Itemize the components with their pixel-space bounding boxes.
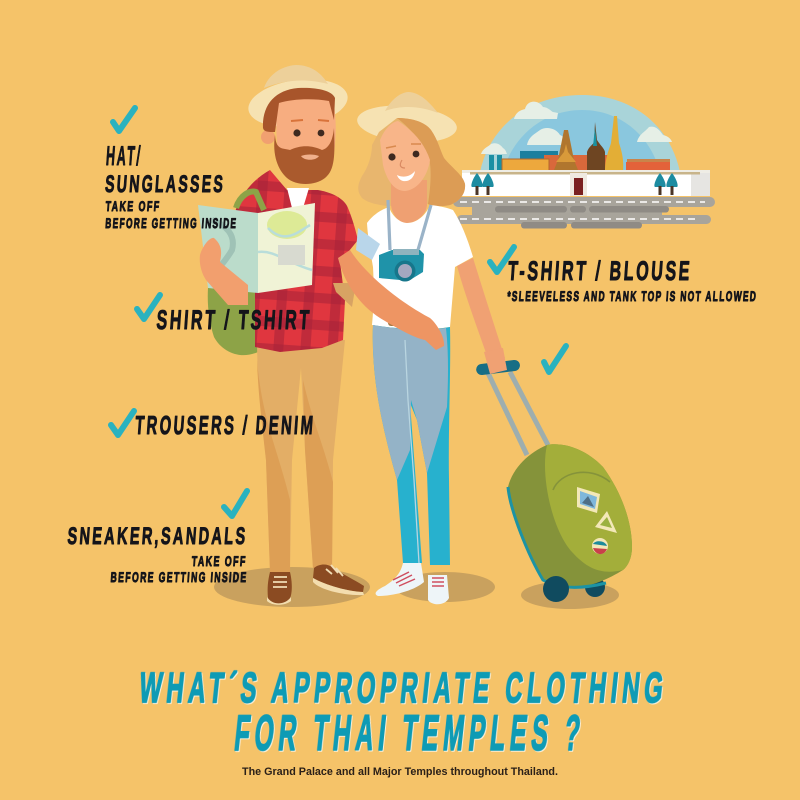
suitcase body	[508, 444, 632, 588]
woman's face	[380, 121, 430, 191]
illustration: Grand Palace temple scene	[453, 95, 715, 228]
label: hat and sunglasses: SUNGLASSES	[104, 171, 226, 198]
man's beard	[274, 128, 334, 184]
sky dome	[480, 95, 680, 172]
man's pointing arm	[338, 250, 444, 350]
man's trousers	[257, 340, 345, 572]
woman's white sneakers	[376, 563, 449, 604]
ground shadow: man	[214, 567, 370, 607]
man's neck and face	[261, 88, 336, 184]
label: hat and sunglasses: BEFORE GETTING INSIDE	[105, 215, 238, 231]
check: shoes	[224, 491, 247, 516]
label: T-shirt and blouse	[507, 256, 758, 304]
label: hat and sunglasses	[104, 141, 238, 231]
brown folded paper	[333, 283, 356, 307]
woman's hat	[356, 92, 458, 146]
label: trousers: TROUSERS / DENIM	[134, 410, 316, 440]
ground shadow: woman	[395, 572, 495, 602]
camera	[379, 249, 424, 282]
blue paper	[356, 228, 380, 260]
label: hat and sunglasses: TAKE OFF	[105, 198, 161, 214]
suitcase front panel	[545, 444, 632, 572]
ground shadow: suitcase	[521, 581, 619, 609]
label: sneakers and sandals: BEFORE GETTING INSIDE	[110, 569, 248, 585]
suitcase zip arc	[553, 472, 610, 490]
man's hair	[263, 88, 335, 132]
check: trousers	[111, 411, 134, 435]
label: hat and sunglasses: HAT/	[105, 141, 143, 171]
suitcase back wheel	[585, 577, 605, 597]
illustration: woman tourist	[356, 92, 505, 604]
man's white undershirt	[287, 188, 309, 208]
hand on handle	[484, 348, 507, 374]
woman's belt	[388, 317, 410, 326]
woman's jeans	[373, 325, 450, 565]
woman's white T-shirt	[367, 205, 473, 329]
label: shirt: SHIRT / TSHIRT	[156, 305, 313, 335]
woman's hair right side	[397, 118, 465, 206]
stickers	[577, 487, 617, 554]
man's eyes	[291, 120, 329, 137]
woman's arm	[457, 258, 505, 364]
label: sneakers and sandals: SNEAKER,SANDALS	[67, 523, 248, 550]
illustration: man tourist	[198, 65, 444, 605]
woman's eyes and smile	[386, 144, 421, 181]
woman's neck	[391, 180, 427, 223]
label: sneakers and sandals	[67, 523, 248, 585]
man's mouth	[301, 154, 319, 160]
trees	[471, 173, 678, 195]
folded map	[198, 203, 315, 293]
temple buildings	[489, 116, 670, 172]
illustration: green suitcase	[476, 348, 632, 602]
title	[137, 664, 670, 761]
man's red plaid shirt	[233, 170, 358, 352]
suitcase rim	[508, 487, 606, 587]
woman's hair	[358, 118, 465, 206]
check: suitcase	[544, 346, 566, 372]
subtitle: The Grand Palace and all Major Temples throughout Thailand.	[242, 766, 558, 778]
man's hat	[245, 65, 351, 133]
camera strap	[388, 200, 431, 250]
suitcase front wheel	[543, 576, 569, 602]
suitcase handle rods	[488, 372, 548, 455]
man's backpack	[208, 240, 258, 355]
check: shirt	[137, 295, 160, 319]
label: sneakers and sandals: TAKE OFF	[191, 553, 247, 569]
check: hat	[113, 108, 135, 131]
man's lower arm and hand	[200, 238, 248, 305]
clouds	[481, 102, 672, 154]
suitcase handle grip	[476, 359, 521, 376]
palace white wall	[462, 170, 710, 196]
check: T-shirt	[490, 247, 514, 272]
backpack strap	[236, 192, 264, 210]
man's brown shoes	[267, 564, 364, 605]
roads	[453, 197, 715, 228]
